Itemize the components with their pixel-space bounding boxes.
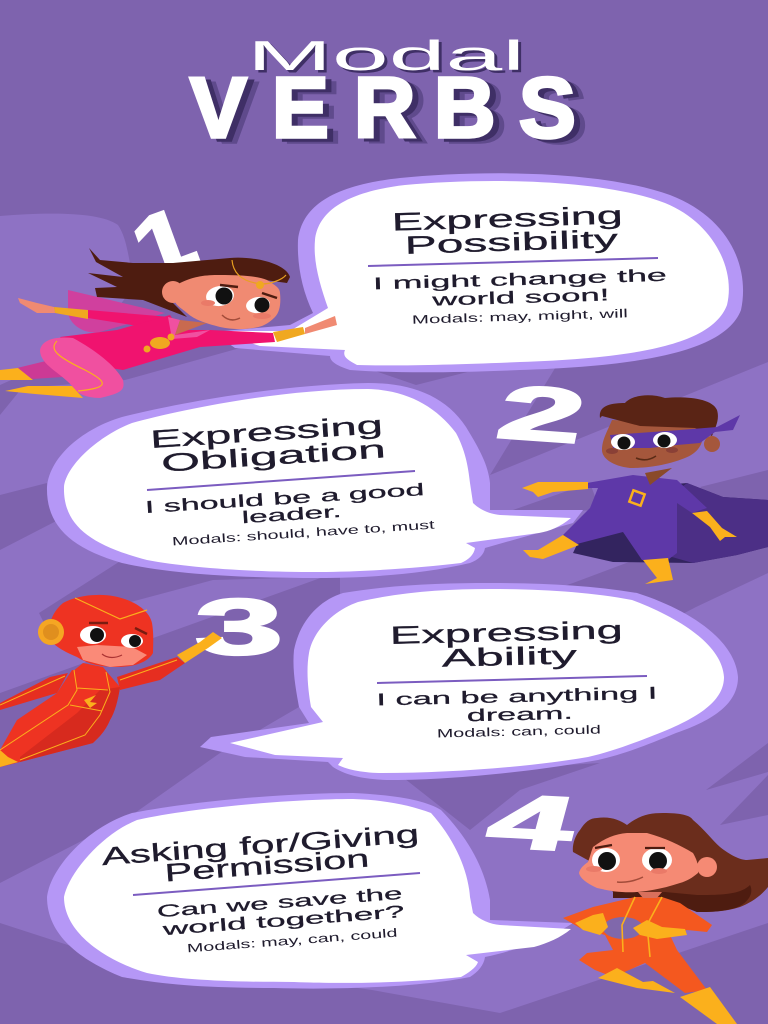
speech bubble 2 bbox=[47, 383, 583, 578]
speech bubble 4 bbox=[47, 793, 573, 989]
text: Expressing Obligation: Modals: should, have to, must bbox=[172, 517, 436, 548]
text: Expressing Obligation: Expressing bbox=[149, 411, 384, 454]
text: Expressing Possibility: Modals: may, might, will bbox=[412, 306, 628, 327]
text: Expressing Obligation: I should be a good bbox=[144, 480, 425, 517]
title line: Modal: Modal bbox=[247, 32, 525, 79]
text: Expressing Obligation: Obligation bbox=[160, 435, 387, 478]
title line: VERBS: VERBS bbox=[196, 64, 582, 159]
number 1: 1 bbox=[120, 188, 208, 297]
text: Expressing Ability: dream. bbox=[467, 704, 573, 725]
panel: ability bbox=[0, 583, 738, 780]
text: Asking for/Giving Permission: Modals: may, can, could bbox=[186, 926, 398, 955]
character: girl in orange bbox=[563, 813, 768, 1024]
speech bubble 1 bbox=[212, 173, 743, 372]
text: Expressing Obligation: leader. bbox=[241, 502, 342, 527]
number 3: 3 bbox=[195, 583, 283, 671]
text: Expressing Ability: Ability bbox=[441, 641, 578, 673]
text: Expressing Ability: Modals: can, could bbox=[437, 722, 601, 741]
text: Asking for/Giving Permission: Can we save the bbox=[156, 884, 403, 921]
text: Expressing Possibility: Possibility bbox=[404, 225, 619, 260]
character: girl in pink bbox=[0, 248, 337, 398]
title bbox=[190, 32, 587, 161]
number 4: 4 bbox=[479, 778, 586, 867]
number 2: 2 bbox=[491, 369, 593, 459]
text: Asking for/Giving Permission: Permission bbox=[164, 845, 370, 887]
panel: obligation bbox=[47, 369, 768, 584]
character: red speedster bbox=[0, 595, 222, 767]
title line: VERBS: VERBS bbox=[201, 66, 587, 161]
panel: permission bbox=[47, 778, 768, 1024]
text: Expressing Possibility: Expressing bbox=[391, 201, 623, 237]
character: boy in purple cape bbox=[522, 395, 768, 584]
text: Expressing Possibility bbox=[368, 201, 667, 327]
text: Asking for/Giving Permission bbox=[101, 820, 420, 955]
text: Expressing Ability bbox=[376, 616, 658, 741]
title line: Modal: Modal bbox=[250, 34, 528, 82]
text: Expressing Ability: I can be anything I bbox=[376, 684, 658, 709]
text: Expressing Obligation bbox=[144, 411, 436, 548]
text: Asking for/Giving Permission: Asking for/Giving bbox=[101, 820, 420, 871]
speech bubble 3 bbox=[200, 583, 738, 780]
title line: VERBS: VERBS bbox=[190, 61, 576, 156]
text: Expressing Possibility: I might change the bbox=[373, 266, 667, 293]
text: Asking for/Giving Permission: world together? bbox=[160, 902, 405, 939]
title line: Modal bbox=[247, 32, 528, 82]
text: Expressing Possibility: world soon! bbox=[430, 285, 610, 310]
text: Expressing Ability: Expressing bbox=[389, 616, 623, 650]
panel: possibility bbox=[0, 173, 743, 398]
